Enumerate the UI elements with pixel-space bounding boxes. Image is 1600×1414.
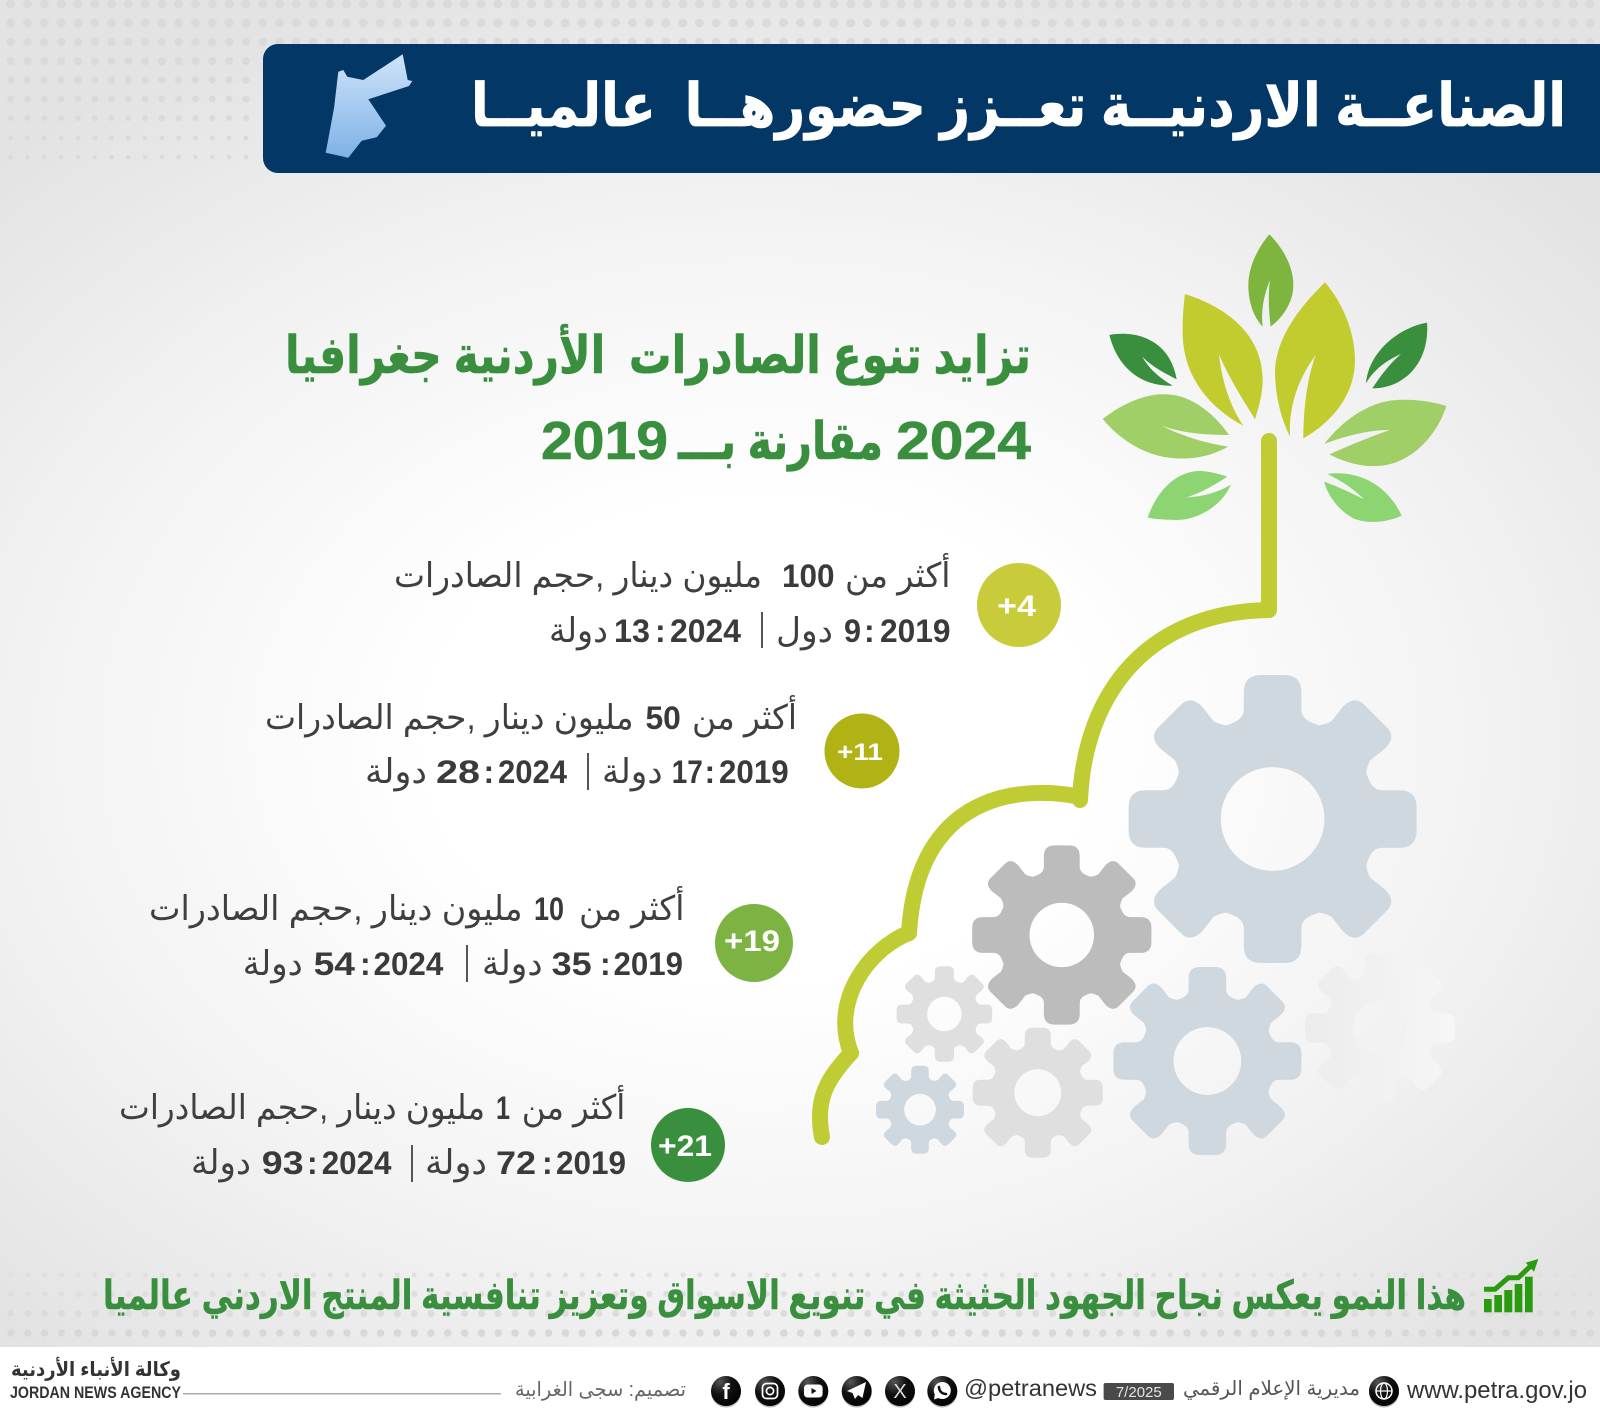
item: more than 1 million: 2024: [322, 1145, 392, 1181]
item: more than 50 million: 28: [436, 754, 480, 790]
social icon: telegram: [842, 1376, 872, 1408]
item: more than 50 million: مليون دينار ,حجم الصادرات: [265, 699, 634, 738]
designer credit: تصميم: سجى الغرابية: [515, 1379, 686, 1401]
item: more than 1 million: 93: [262, 1145, 304, 1181]
item: more than 50 million: دولة: [602, 753, 663, 792]
item: more than 100 million: 13: [614, 613, 650, 649]
agency logo: [10, 1356, 182, 1402]
item: more than 1 million: :: [542, 1145, 553, 1181]
heading: مقارنة بـــ: [677, 413, 883, 472]
item: more than 50 million: 2024: [498, 754, 567, 790]
heading: 2019: [541, 411, 668, 471]
department name: مديرية الإعلام الرقمي: [1183, 1378, 1360, 1401]
agency logo: JORDAN NEWS AGENCY: [10, 1383, 182, 1402]
item: more than 1 million: 72: [496, 1145, 536, 1181]
item: more than 50 million: 17: [672, 754, 703, 790]
item: more than 1 million: [119, 1085, 725, 1183]
item: more than 50 million: :: [484, 754, 494, 790]
item: more than 10 million: مليون دينار ,حجم الصادرات: [149, 890, 523, 929]
handle: @petranews: [964, 1375, 1097, 1401]
social icon: youtube: [798, 1376, 828, 1408]
item: more than 10 million: 2024: [374, 946, 443, 982]
social icon: facebook: [711, 1376, 741, 1408]
social icon: X: [885, 1376, 915, 1408]
item: more than 1 million: :: [307, 1145, 318, 1181]
badge: +21: +21: [658, 1130, 712, 1163]
social icon: whatsapp: [927, 1376, 957, 1408]
item: more than 10 million: أكثر من: [579, 886, 684, 929]
badge: +4: +4: [997, 590, 1036, 623]
item: more than 10 million: :: [360, 946, 371, 982]
vine stem: [820, 441, 1269, 1137]
date badge: 7/2025: [1116, 1384, 1162, 1401]
social icon: instagram: [755, 1376, 785, 1408]
footer bar: [0, 1347, 1600, 1414]
item: more than 1 million: مليون دينار ,حجم الصادرات: [119, 1089, 485, 1128]
item: more than 10 million: 54: [314, 946, 355, 982]
item: more than 100 million: 9: [844, 613, 861, 649]
header banner: [263, 44, 1600, 173]
item: more than 50 million: [265, 695, 900, 792]
item: more than 10 million: :: [600, 946, 611, 982]
item: more than 100 million: [394, 553, 1061, 651]
agency logo: وكالة الأنباء الأردنية: [11, 1356, 181, 1381]
badge: +19: +19: [724, 925, 780, 958]
item: more than 1 million: 1: [496, 1090, 510, 1126]
item: more than 1 million: 2019: [556, 1145, 626, 1181]
item: more than 50 million: :: [704, 754, 715, 790]
icon: growth chart: [1484, 1259, 1538, 1312]
heading: [285, 323, 1031, 472]
item: more than 100 million: دولة: [549, 612, 608, 651]
item: more than 50 million: دولة: [365, 753, 427, 792]
item: more than 100 million: دول: [776, 612, 833, 651]
item: more than 100 million: أكثر من: [845, 553, 950, 596]
item: more than 10 million: 2019: [614, 946, 683, 982]
date badge: [1104, 1383, 1174, 1401]
item: more than 100 million: 2024: [670, 613, 741, 649]
heading: 2024: [896, 411, 1031, 471]
item: more than 1 million: دولة: [191, 1144, 251, 1183]
item: more than 50 million: أكثر من: [692, 695, 797, 738]
tree illustration: leaves: [1103, 234, 1446, 522]
item: more than 1 million: أكثر من: [522, 1085, 625, 1128]
item: more than 100 million: :: [864, 613, 875, 649]
item: more than 10 million: دولة: [243, 945, 303, 984]
item: more than 50 million: 2019: [719, 754, 789, 790]
item: more than 100 million: :: [655, 613, 666, 649]
website: www.petra.gov.jo: [1406, 1377, 1587, 1404]
badge: +11: +11: [837, 739, 883, 766]
item: more than 10 million: دولة: [482, 945, 543, 984]
item: more than 10 million: 10: [534, 891, 564, 927]
item: more than 100 million: 100: [782, 558, 834, 594]
badge: +4: [977, 563, 1061, 647]
gears illustration: [876, 675, 1455, 1158]
item: more than 100 million: مليون دينار ,حجم الصادرات: [394, 557, 762, 596]
badge: +21: [651, 1108, 725, 1182]
icon: globe: [1369, 1376, 1399, 1408]
social icon: facebook: f: [722, 1379, 730, 1404]
item: more than 1 million: دولة: [425, 1144, 487, 1183]
badge: +11: [824, 714, 900, 788]
icon: Jordan map: [326, 54, 412, 158]
heading: تزايد تنوع الصادرات الأردنية جغرافيا: [285, 323, 1031, 386]
item: more than 100 million: 2019: [880, 613, 950, 649]
badge: +19: [715, 904, 793, 982]
item: more than 50 million: 50: [646, 700, 681, 736]
social icon: X: X: [893, 1381, 907, 1403]
item: more than 10 million: 35: [552, 946, 592, 982]
item: more than 10 million: [149, 886, 793, 984]
